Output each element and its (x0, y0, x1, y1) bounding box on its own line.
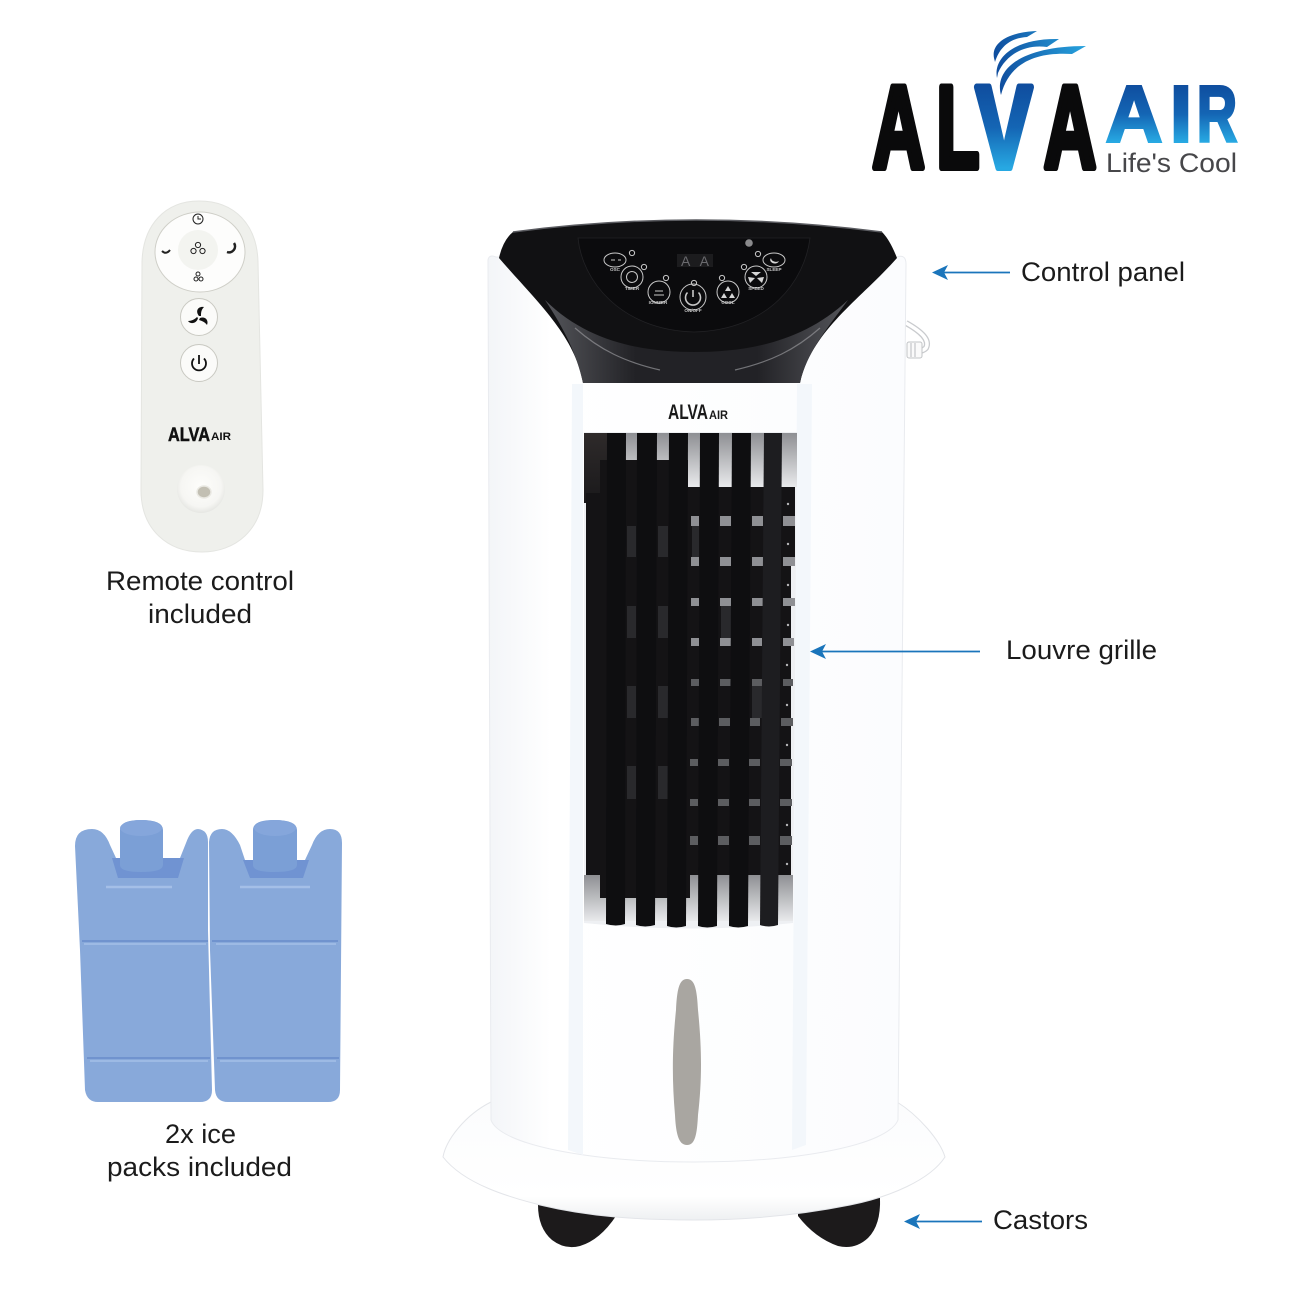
logo word AIR: A (1106, 69, 1162, 159)
arrow: control panel (932, 265, 1010, 280)
logo: Alva Air Life's Cool (872, 31, 1237, 193)
fan button (180, 298, 218, 336)
arrow: castors (904, 1214, 982, 1229)
logo tagline: Life's Cool (1106, 148, 1237, 178)
logo swoosh feathers (994, 31, 1086, 95)
grille lower gradient (584, 875, 793, 921)
button labels: COOL (721, 300, 735, 305)
inner filter rack (586, 460, 795, 898)
grille opening (584, 432, 797, 928)
rack windows (691, 516, 795, 646)
rack screw dots (786, 503, 789, 865)
ice packs (75, 820, 342, 1102)
pad centre button (178, 230, 218, 270)
button labels (610, 267, 782, 313)
button glyphs (721, 258, 779, 298)
control panel (578, 238, 810, 332)
logo word AIR: R (1197, 69, 1237, 159)
louvre grille (584, 432, 797, 928)
hood glossy lens band (545, 300, 848, 383)
ice packs caption: packs included (107, 1152, 292, 1182)
remote caption (106, 566, 294, 629)
button labels: SPEED (748, 286, 764, 291)
pad icons (162, 214, 235, 281)
power cord and plug (906, 323, 927, 358)
label: control panel: Control panel (1021, 257, 1185, 287)
rack lower windows (690, 679, 793, 845)
grille upper gradient slots (607, 433, 797, 487)
button rings (604, 250, 785, 310)
button labels: OSC (610, 267, 621, 272)
button labels: IONIZER (649, 300, 668, 305)
label: louvre grille: Louvre grille (1006, 635, 1157, 665)
button labels: TIMER (625, 286, 640, 291)
display: AA (681, 253, 710, 269)
cooler brand mark: AIR (709, 408, 728, 422)
black top hood (499, 220, 897, 383)
rack dark panes (627, 526, 762, 799)
button labels: ON/OFF (684, 308, 702, 313)
cooler brand mark: ALVA (668, 401, 708, 424)
indicator dot (745, 239, 753, 247)
remote brand mark: ALVA (168, 425, 210, 446)
logo word AIR (1106, 69, 1237, 159)
hood highlight curves (575, 328, 820, 370)
grille left dark slot (584, 433, 607, 503)
logo word AIR: I (1170, 70, 1192, 158)
logo word ALVA: A (1044, 62, 1096, 193)
remote body (141, 201, 263, 552)
logo word ALVA (872, 62, 1096, 193)
logo word ALVA: A (872, 62, 925, 193)
base (443, 1102, 945, 1220)
logo word ALVA: V (976, 62, 1032, 193)
ice pack left (75, 820, 212, 1102)
directional pad (155, 212, 245, 292)
ice packs caption (107, 1119, 292, 1182)
ice packs caption: 2x ice (165, 1119, 236, 1149)
remote emitter (177, 465, 225, 513)
label: castors: Castors (993, 1205, 1088, 1235)
louvre slats (606, 433, 782, 928)
hood top edge highlight (513, 220, 882, 232)
logo word ALVA: L (937, 63, 979, 193)
water level gauge (673, 979, 701, 1145)
remote control (141, 201, 263, 552)
button labels: SLEEP (766, 267, 782, 272)
ice pack right (209, 820, 342, 1102)
remote brand mark: AIR (211, 431, 231, 443)
remote caption: Remote control (106, 566, 294, 596)
tower body (488, 256, 906, 1162)
remote caption: included (148, 599, 252, 629)
arrow: louvre grille (810, 644, 980, 659)
front panel side strips (568, 384, 812, 1155)
castors (538, 1198, 880, 1247)
power button (180, 344, 218, 382)
panel outline (578, 238, 810, 332)
air cooler product (443, 220, 945, 1247)
